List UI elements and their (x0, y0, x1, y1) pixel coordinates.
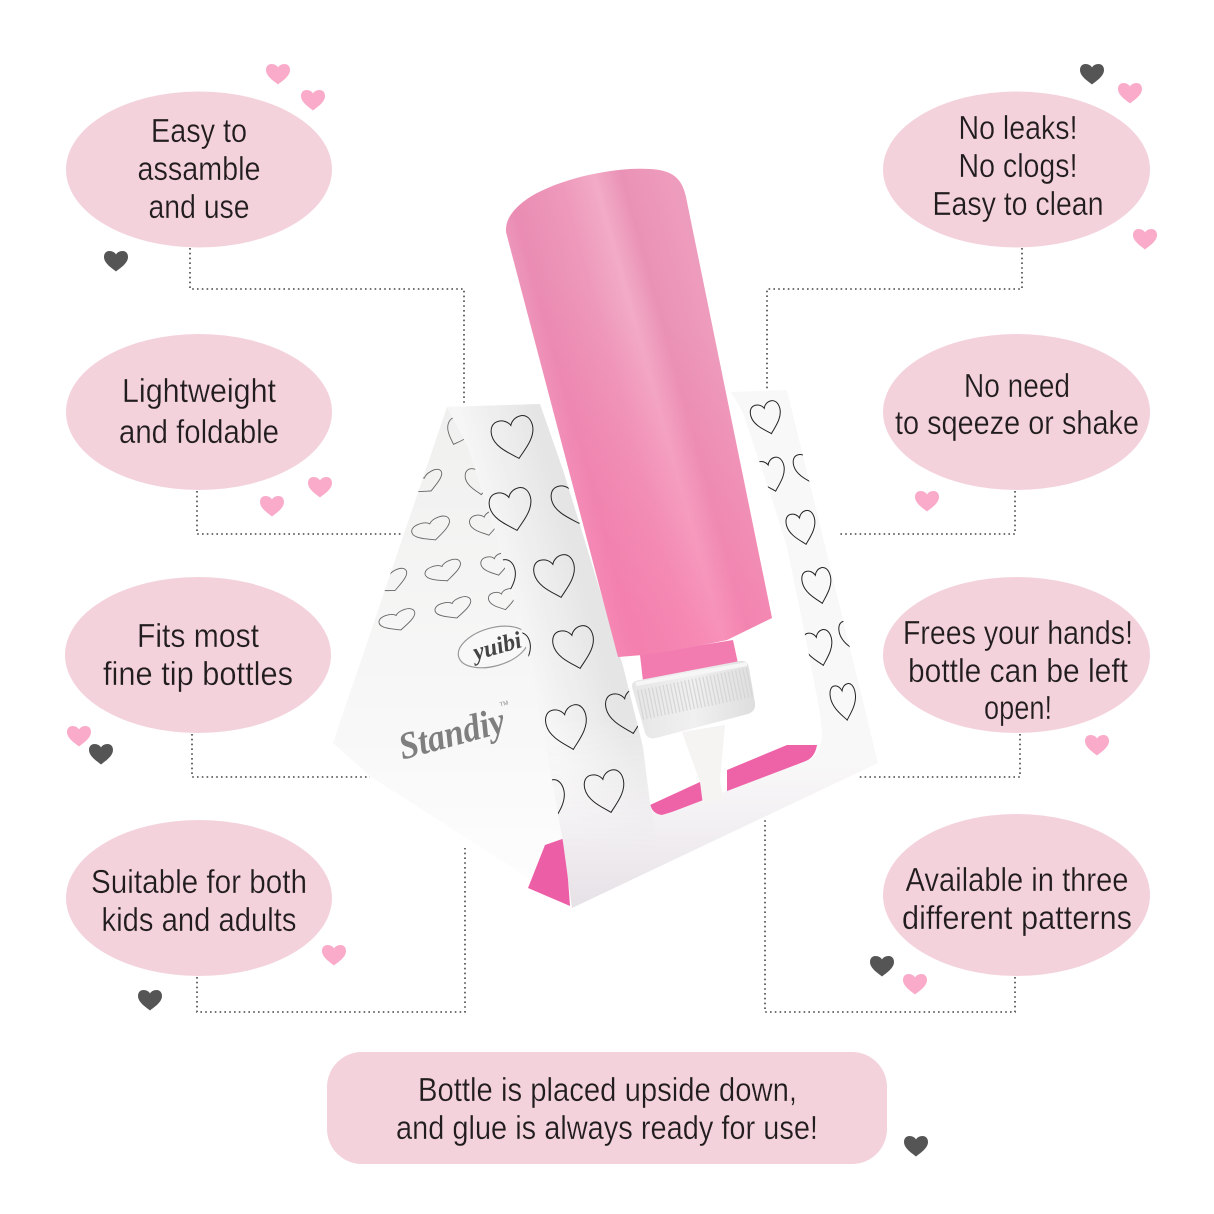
callout: three patterns (883, 814, 1150, 976)
bottle body (506, 169, 772, 657)
stand back panel (350, 408, 536, 694)
callout: three patterns: Available in three (906, 861, 1128, 898)
brand logo: Standiy (394, 700, 509, 768)
callout: easy to assemble: and use (148, 188, 250, 225)
oval logo seen through panel: yuibi (467, 627, 525, 667)
callout: kids and adults: Suitable for both (91, 863, 307, 900)
callout: bottle upside down: and glue is always ready for use! (396, 1109, 818, 1146)
callout: frees your hands (883, 577, 1150, 733)
callout: lightweight: and foldable (119, 413, 279, 450)
callout: fits most bottles: fine tip bottles (103, 655, 293, 692)
callout: easy to assemble: Easy to (151, 112, 247, 149)
callout: no leaks (883, 92, 1150, 248)
brand logo: TM (499, 700, 509, 708)
callout: frees your hands: open! (984, 689, 1052, 726)
bottle neck (640, 640, 739, 690)
callout: frees your hands: Frees your hands! (903, 614, 1133, 651)
callout: bottle upside down: Bottle is placed upside down, (418, 1071, 797, 1108)
callout: lightweight (66, 334, 332, 490)
pink base right (650, 745, 817, 815)
callout: fits most bottles: Fits most (137, 617, 259, 654)
callout: lightweight: Lightweight (122, 372, 276, 409)
callout: frees your hands: bottle can be left (908, 652, 1128, 689)
callout: kids and adults: kids and adults (102, 901, 296, 938)
callout: no need to squeeze: to sqeeze or shake (895, 404, 1139, 441)
callout: no need to squeeze (883, 334, 1150, 490)
pink base left (528, 838, 570, 906)
callout: no need to squeeze: No need (964, 367, 1070, 404)
callout: three patterns: different patterns (902, 899, 1132, 936)
callout: easy to assemble (66, 92, 332, 248)
bottle nozzle (682, 725, 725, 805)
callout: no leaks: Easy to clean (932, 185, 1104, 222)
stand front frame (447, 390, 878, 908)
callout: no leaks: No leaks! (958, 109, 1078, 146)
callout: fits most bottles (65, 577, 331, 733)
oval logo seen through panel (453, 619, 533, 675)
callout: easy to assemble: assamble (138, 150, 260, 187)
connector lines (190, 248, 1022, 1012)
callout: bottle upside down (327, 1052, 887, 1164)
bottle cap (632, 661, 755, 738)
callout: kids and adults (66, 820, 332, 976)
callout: no leaks: No clogs! (958, 147, 1078, 184)
product: stand with bottle (333, 169, 878, 908)
